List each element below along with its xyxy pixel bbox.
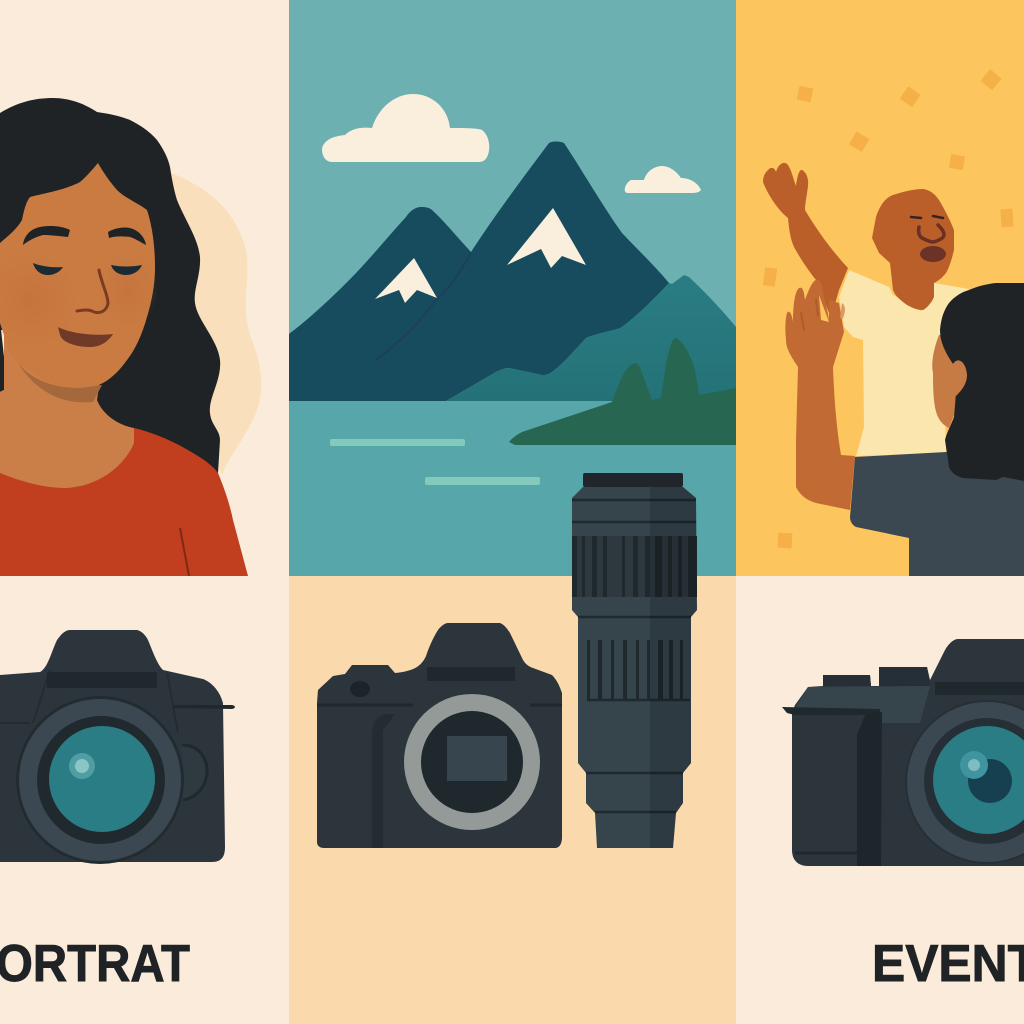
dark mountains	[289, 142, 669, 401]
ridge line	[376, 253, 471, 360]
camera: right body	[782, 639, 1024, 866]
ribbing lower stripes	[587, 640, 683, 700]
shirt seam	[180, 528, 189, 576]
sensor	[447, 736, 507, 781]
water	[289, 401, 736, 576]
prism lines	[0, 670, 178, 733]
neck shadow	[18, 363, 102, 402]
panel: background right bottom	[736, 576, 1024, 1024]
woman hair	[940, 283, 1024, 481]
left brow	[23, 226, 70, 245]
small cloud	[625, 166, 701, 193]
water highlight 2	[425, 477, 540, 485]
woman thumb	[840, 303, 845, 320]
lens glass	[49, 726, 155, 832]
shirt	[0, 428, 248, 576]
barrel side shading	[650, 487, 697, 848]
man nose	[919, 225, 944, 242]
hair	[0, 98, 220, 473]
island	[509, 338, 736, 445]
mount ring	[404, 694, 540, 830]
left eye	[33, 263, 63, 275]
sky	[289, 0, 736, 402]
base line	[795, 852, 857, 854]
lens rings	[905, 700, 1024, 864]
pupil	[968, 759, 1012, 803]
neck	[0, 320, 134, 500]
viewfinder strip	[935, 682, 1024, 695]
man mouth	[920, 246, 946, 262]
man facial features	[911, 216, 943, 218]
large cloud	[322, 94, 489, 162]
lens rings	[16, 696, 184, 864]
right eye	[111, 265, 142, 275]
man head	[872, 189, 954, 310]
top plate	[795, 686, 930, 723]
halo behind head	[150, 173, 261, 475]
finger creases	[801, 300, 818, 330]
man raised arm	[763, 163, 848, 318]
strap lug	[782, 707, 880, 715]
lens glass	[933, 726, 1024, 834]
barrel	[572, 487, 697, 848]
dial	[350, 681, 370, 697]
lens glint	[960, 751, 988, 779]
right teal mountain	[446, 275, 736, 401]
grip shadow	[857, 712, 882, 866]
face	[0, 163, 155, 388]
top buttons	[823, 667, 930, 686]
snow cap small peak	[375, 258, 437, 303]
grip curve	[182, 745, 207, 800]
barrel seams	[572, 500, 696, 812]
lower left hair strand	[0, 320, 4, 392]
ribbing upper band	[572, 536, 697, 597]
right cheek	[98, 252, 158, 328]
mouth	[58, 327, 113, 347]
viewfinder strip	[427, 667, 515, 681]
label: portrait: ORTRAT	[0, 935, 190, 993]
body line	[317, 704, 562, 706]
strap lug	[173, 705, 235, 709]
snow cap main peak	[507, 208, 586, 268]
yellow background	[736, 0, 1024, 576]
woman ear	[950, 360, 967, 396]
grip line	[372, 714, 395, 848]
mount hole	[421, 711, 523, 813]
camera: body with open mount	[317, 623, 562, 848]
camera: left body	[0, 630, 235, 864]
woman body	[850, 452, 1024, 576]
panel: background left	[0, 0, 289, 1024]
confetti	[763, 69, 1014, 548]
woman cheek	[932, 335, 960, 428]
man shirt	[839, 270, 969, 456]
ribbing upper stripes	[572, 536, 697, 597]
telephoto lens	[572, 473, 697, 848]
panel: event scene	[736, 0, 1024, 576]
body	[317, 623, 562, 848]
finger gap	[819, 295, 829, 322]
water highlight 1	[330, 439, 465, 446]
right brow	[108, 228, 146, 245]
body	[792, 639, 1024, 866]
panel: portrait scene	[0, 98, 261, 576]
cap	[583, 473, 683, 487]
panel: landscape scene	[289, 0, 736, 576]
woman raised arm and hand	[785, 280, 855, 510]
panel: background centre bottom	[289, 576, 736, 1024]
viewfinder strip	[47, 672, 157, 688]
nose	[77, 270, 108, 313]
left cheek	[0, 252, 78, 348]
body	[0, 630, 225, 862]
lens glint	[69, 753, 95, 779]
